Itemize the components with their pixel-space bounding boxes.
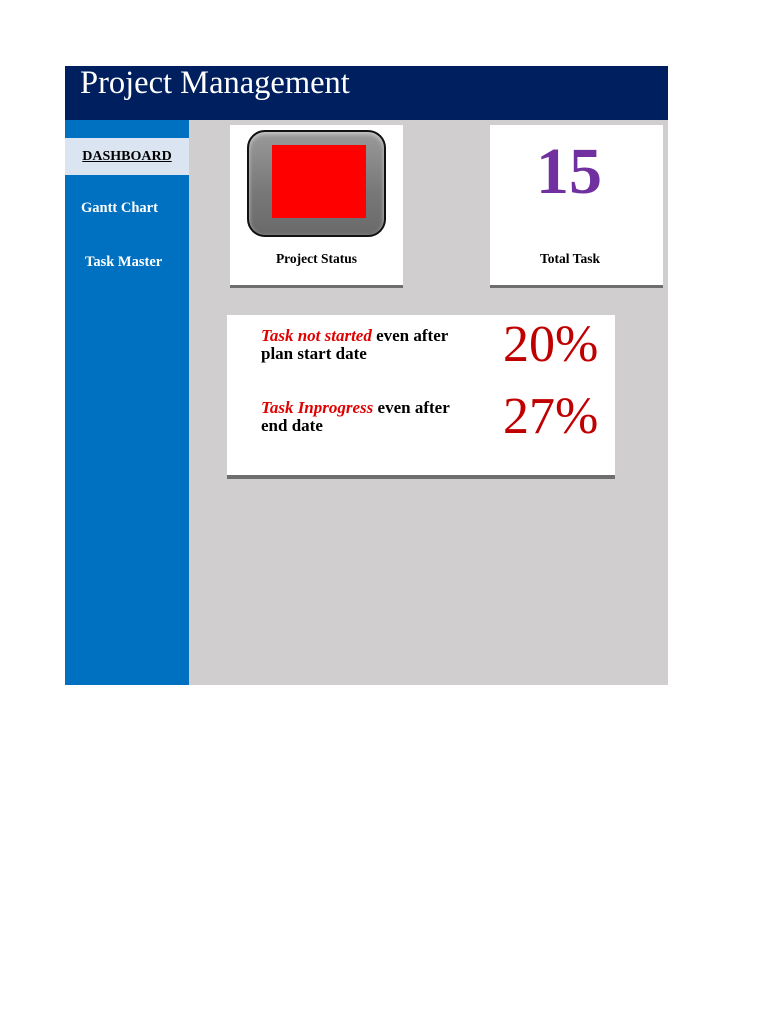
label: project status: Project Status [276,251,357,266]
panel: total task [490,125,663,288]
main grey area [189,120,668,685]
text: not started: plan start date [261,344,367,363]
panel: project status [230,125,403,288]
panel: delay metrics [227,315,615,479]
icon: status light [247,130,386,237]
header bar [65,66,668,120]
text: not started: Task not started even after [261,326,448,345]
text: inprogress: end date [261,416,323,435]
nav: task master: Task Master [85,254,162,270]
title: Project Management [80,65,350,101]
value: 20%: 20% [503,316,598,373]
number: 15: 15 [536,135,602,208]
label: total task: Total Task [540,251,600,266]
nav: dashboard [65,138,189,175]
value: 27%: 27% [503,388,598,445]
text: inprogress: Task Inprogress even after [261,398,450,417]
nav: gantt chart: Gantt Chart [81,200,158,216]
sidebar [65,120,189,685]
text: inprogress [261,398,450,435]
text: not started [261,326,448,363]
nav: dashboard: DASHBOARD [82,149,172,164]
